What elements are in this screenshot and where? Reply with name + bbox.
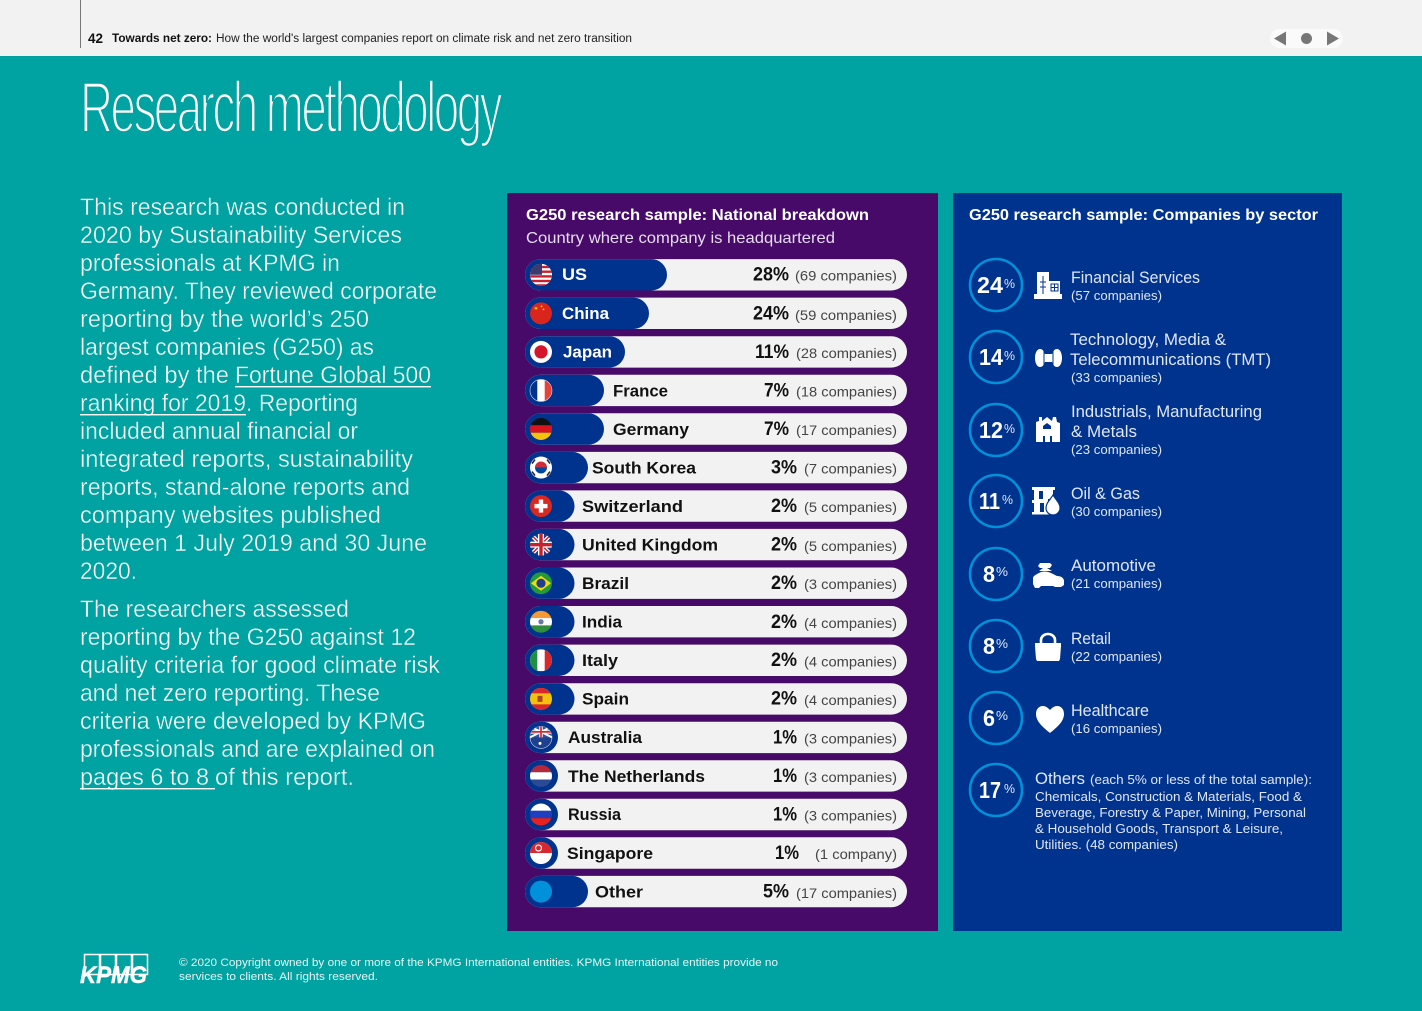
sector: others <box>970 764 1312 852</box>
row: South Korea: 3% <box>771 456 797 478</box>
row: Italy: (4 companies) <box>804 654 897 670</box>
panel: companies by sector <box>953 193 1342 931</box>
intro text block: quality criteria for good climate risk <box>80 652 441 679</box>
sector: financial services: % <box>1004 276 1015 291</box>
sector: technology, media and telecoms: % <box>1004 348 1015 363</box>
row: United Kingdom: (5 companies) <box>804 538 897 554</box>
row: Other: (17 companies) <box>796 885 897 901</box>
row: Australia: (3 companies) <box>804 730 897 746</box>
copyright <box>179 957 778 983</box>
row: Russia: Russia <box>568 805 622 824</box>
intro text block: . Reporting <box>246 390 358 417</box>
row: US: 28% <box>753 263 789 285</box>
sector: technology, media and telecoms: (33 companies) <box>1071 371 1162 385</box>
panel heading: G250 research sample: Companies by sector <box>969 207 1318 224</box>
intro text block: reporting by the world’s 250 <box>80 306 369 333</box>
intro text block: pages 6 to 8 <box>80 764 209 791</box>
sector: financial services: (57 companies) <box>1071 289 1162 303</box>
sector: healthcare: % <box>996 708 1008 723</box>
intro text block <box>80 194 441 791</box>
navigation arrows <box>1270 29 1343 48</box>
row: India: 2% <box>771 611 797 633</box>
intro text block: The researchers assessed <box>80 596 349 623</box>
row: Russia: (3 companies) <box>804 808 897 824</box>
row: Singapore <box>525 837 907 869</box>
row: China: China <box>562 304 610 323</box>
row: Singapore: Singapore <box>567 844 653 863</box>
row: Switzerland <box>525 490 907 522</box>
intro text block: included annual financial or <box>80 418 358 445</box>
row: Japan: Japan <box>563 342 612 362</box>
sector: oil and gas <box>970 475 1162 527</box>
row: Switzerland: 2% <box>771 495 797 517</box>
row: Switzerland: (5 companies) <box>804 499 897 515</box>
row: Germany: Germany <box>613 420 690 439</box>
copyright: © 2020 Copyright owned by one or more of the KPMG International entities. KPMG International entities provide no <box>179 957 778 969</box>
header bar <box>0 0 1422 56</box>
sector: financial services: Financial Services <box>1071 269 1200 287</box>
sector: healthcare: (16 companies) <box>1071 722 1162 736</box>
panel: national breakdown <box>507 193 938 931</box>
intro text block: reporting by the G250 against 12 <box>80 624 416 651</box>
row: India: India <box>582 612 623 631</box>
sector: technology, media and telecoms: Technology, Media & <box>1070 331 1226 349</box>
header bar: Towards net zero: <box>112 33 212 45</box>
row: Italy: Italy <box>582 651 619 670</box>
intro text block: between 1 July 2019 and 30 June <box>80 530 427 557</box>
row: France: 7% <box>764 380 789 402</box>
row: Brazil: Brazil <box>582 574 629 593</box>
row: South Korea <box>525 452 907 483</box>
sector: automotive: (21 companies) <box>1071 577 1162 591</box>
sector: healthcare: 6 <box>983 705 995 731</box>
row: Japan: (28 companies) <box>796 345 897 361</box>
row: India: (4 companies) <box>804 615 897 631</box>
sector: healthcare: Healthcare <box>1071 702 1149 720</box>
sector: automotive: Automotive <box>1071 557 1156 575</box>
intro text block: Fortune Global 500 <box>235 362 431 389</box>
row: Spain <box>525 683 907 715</box>
row: China: (59 companies) <box>795 307 897 323</box>
intro text block: This research was conducted in <box>80 194 405 221</box>
KPMG logo: KPMG <box>80 962 147 989</box>
row: Germany: (17 companies) <box>796 422 897 438</box>
intro text block: ranking for 2019 <box>80 390 246 417</box>
intro text block: of this report. <box>215 764 354 791</box>
intro text block: 2020 by Sustainability Services <box>80 222 402 249</box>
sector: technology, media and telecoms: 14 <box>979 344 1003 370</box>
row: Spain: (4 companies) <box>804 692 897 708</box>
row: Germany: 7% <box>764 418 789 440</box>
sector: industrials: % <box>1004 421 1015 436</box>
sector: technology, media and telecoms <box>970 331 1271 385</box>
row: Russia: 1% <box>773 803 797 825</box>
row: US: (69 companies) <box>795 267 897 283</box>
row: Germany <box>525 413 907 445</box>
row: Switzerland: Switzerland <box>582 497 683 516</box>
row: France <box>525 375 907 406</box>
sector: financial services: 24 <box>977 272 1003 298</box>
row: Spain: Spain <box>582 690 629 708</box>
panel heading: G250 research sample: National breakdown <box>526 207 869 224</box>
row: Brazil <box>525 568 907 599</box>
sector: retail: (22 companies) <box>1071 650 1162 664</box>
row: France: France <box>613 381 668 400</box>
sector: others: Others <box>1035 769 1085 788</box>
intro text block: 2020. <box>80 558 137 585</box>
sector: others: 17 <box>979 777 1001 803</box>
intro text block: company websites published <box>80 502 381 529</box>
row: Other: 5% <box>763 880 789 902</box>
panel subheading: Country where company is headquartered <box>526 230 835 247</box>
row: US: US <box>562 265 587 284</box>
row: Singapore: 1% <box>775 842 799 864</box>
sector: industrials: 12 <box>979 417 1003 443</box>
sector: oil and gas: 11 <box>979 488 1000 514</box>
row: United Kingdom: United Kingdom <box>582 535 718 554</box>
sector: healthcare <box>970 692 1162 744</box>
sector: industrials: Industrials, Manufacturing <box>1071 403 1262 421</box>
sector: others: & Household Goods, Transport & Leisure, <box>1035 822 1283 836</box>
sector: industrials <box>970 403 1262 457</box>
header bar: How the world's largest companies report on climate risk and net zero transition <box>216 33 632 45</box>
intro text block: criteria were developed by KPMG <box>80 708 426 735</box>
row: Australia: Australia <box>568 728 643 747</box>
row: The Netherlands: The Netherlands <box>568 767 705 786</box>
intro text block: defined by the <box>80 362 229 389</box>
row: Russia <box>525 799 907 830</box>
sector: industrials: (23 companies) <box>1071 443 1162 457</box>
row: The Netherlands: (3 companies) <box>804 769 897 785</box>
row: India <box>525 606 907 637</box>
intro text block: professionals at KPMG in <box>80 250 340 277</box>
row: Brazil: (3 companies) <box>804 576 897 592</box>
row: Italy: 2% <box>771 649 797 671</box>
row: Australia: 1% <box>773 726 797 748</box>
row: China <box>525 298 907 329</box>
sector: automotive <box>970 548 1162 600</box>
sector: oil and gas: Oil & Gas <box>1071 485 1140 503</box>
intro text block: and net zero reporting. These <box>80 680 380 707</box>
row: Italy <box>525 645 907 676</box>
sector: financial services <box>970 259 1200 311</box>
sector: automotive: % <box>996 564 1008 579</box>
row: Other: Other <box>595 882 643 901</box>
row: Spain: 2% <box>771 688 797 710</box>
row: Japan: 11% <box>755 341 789 363</box>
intro text block: professionals and are explained on <box>80 736 435 763</box>
sector: retail <box>970 620 1162 672</box>
row: France: (18 companies) <box>796 384 897 400</box>
row: Brazil: 2% <box>771 572 797 594</box>
intro text block: integrated reports, sustainability <box>80 446 413 473</box>
sector: retail: % <box>996 636 1008 651</box>
sector: oil and gas: % <box>1002 492 1013 507</box>
sector: automotive: 8 <box>983 561 995 587</box>
intro text block: largest companies (G250) as <box>80 334 374 361</box>
row: The Netherlands <box>525 760 907 792</box>
row: United Kingdom: 2% <box>771 534 797 556</box>
sector: industrials: & Metals <box>1071 423 1137 441</box>
sector: others: Chemicals, Construction & Materials, Food & <box>1035 790 1303 804</box>
sector: others: Beverage, Forestry & Paper, Mining, Personal <box>1035 806 1306 820</box>
copyright: services to clients. All rights reserved. <box>179 971 378 983</box>
row: Other <box>525 876 907 907</box>
sector: others: Utilities. (48 companies) <box>1035 838 1178 852</box>
row: US <box>525 259 907 290</box>
row: Singapore: (1 company) <box>815 846 897 862</box>
row: South Korea: (7 companies) <box>804 460 897 476</box>
sector: technology, media and telecoms: Telecommunications (TMT) <box>1070 351 1271 369</box>
intro text block: reports, stand-alone reports and <box>80 474 410 501</box>
row: South Korea: South Korea <box>592 458 697 478</box>
sector: others: (each 5% or less of the total sample): <box>1090 773 1312 787</box>
sector: oil and gas: (30 companies) <box>1071 505 1162 519</box>
row: The Netherlands: 1% <box>773 765 797 787</box>
sector: retail: Retail <box>1071 630 1111 648</box>
row: Japan <box>525 336 907 368</box>
row: China: 24% <box>753 302 789 324</box>
sector: retail: 8 <box>983 633 995 659</box>
header bar: 42 <box>88 31 103 46</box>
title: Research methodology <box>80 68 503 148</box>
row: Australia <box>525 722 907 753</box>
row: United Kingdom <box>525 529 907 560</box>
intro text block: Germany. They reviewed corporate <box>80 278 437 305</box>
sector: others: % <box>1004 781 1015 796</box>
